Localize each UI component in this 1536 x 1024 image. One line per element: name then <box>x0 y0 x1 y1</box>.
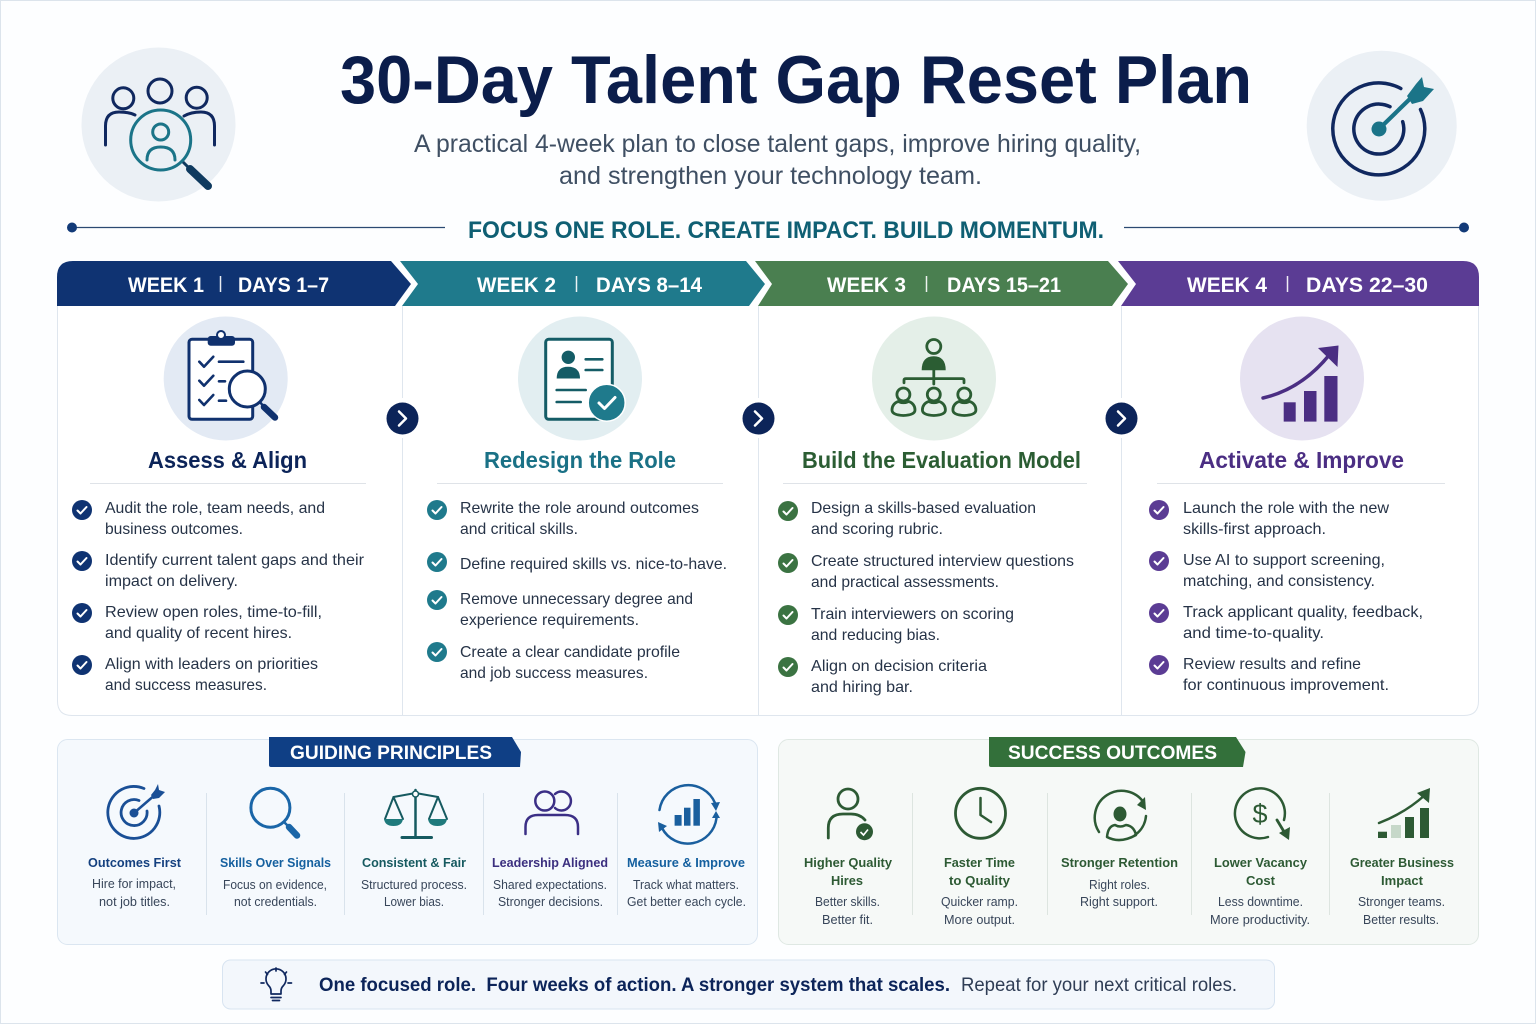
outcome: stronger retention: Right roles. <box>1089 878 1150 892</box>
icon: org hierarchy <box>872 316 996 440</box>
checklist: and scoring rubric. <box>811 521 943 538</box>
checklist: and reducing bias. <box>811 627 940 644</box>
outcome: greater business impact: Impact <box>1381 873 1424 888</box>
outcome: stronger retention <box>1061 791 1178 909</box>
tagline <box>67 217 1469 244</box>
outcome: faster time to quality <box>941 788 1018 927</box>
footer callout <box>222 960 1274 1009</box>
panel: weekly plan card <box>58 300 1478 716</box>
tagline: FOCUS ONE ROLE. CREATE IMPACT. BUILD MOMENTUM. <box>468 217 1104 244</box>
panel: week 1 assess and align <box>72 316 366 694</box>
checklist: and job success measures. <box>460 665 648 682</box>
principle: leadership aligned: Stronger decisions. <box>498 895 603 909</box>
week 1 ribbon: DAYS 1–7 <box>238 274 329 297</box>
panel: week 4 activate and improve <box>1149 316 1445 694</box>
panel: guiding principles <box>58 737 758 944</box>
outcome: faster time to quality: Quicker ramp. <box>941 895 1018 909</box>
checklist: Identify current talent gaps and their <box>105 552 365 569</box>
checklist: and critical skills. <box>460 521 578 538</box>
arrow: week 3 to week 4 <box>1106 402 1138 434</box>
checklist: experience requirements. <box>460 612 639 629</box>
outcome: stronger retention: Stronger Retention <box>1061 855 1178 870</box>
checklist: business outcomes. <box>105 521 243 538</box>
checklist: and practical assessments. <box>811 574 999 591</box>
heading: Redesign the Role <box>484 447 676 473</box>
week 2 ribbon: DAYS 8–14 <box>596 274 702 297</box>
principle: skills over signals: Focus on evidence, <box>223 878 327 892</box>
checklist: skills-first approach. <box>1183 521 1326 538</box>
checklist: Use AI to support screening, <box>1183 552 1385 569</box>
principle: outcomes first: not job titles. <box>99 895 170 909</box>
week 3 ribbon <box>755 261 1128 306</box>
checklist: Review results and refine <box>1183 656 1361 673</box>
outcome: greater business impact: Stronger teams. <box>1358 895 1445 909</box>
checklist: Align on decision criteria <box>811 658 987 675</box>
outcome: lower vacancy cost: $ <box>1252 799 1268 829</box>
week 2 ribbon <box>400 261 765 306</box>
outcome: higher quality hires: Better fit. <box>822 913 873 927</box>
heading: Build the Evaluation Model <box>802 447 1081 473</box>
checklist: Create structured interview questions <box>811 553 1074 570</box>
subtitle: A practical 4-week plan to close talent gaps, improve hiring quality, <box>414 130 1141 158</box>
banner: success outcomes: SUCCESS OUTCOMES <box>1008 743 1217 764</box>
principle: leadership aligned: Shared expectations. <box>493 878 607 892</box>
icon: team search <box>82 48 236 202</box>
outcome: faster time to quality: More output. <box>944 913 1015 927</box>
checklist: matching, and consistency. <box>1183 573 1375 590</box>
subtitle <box>414 130 1141 190</box>
checklist: impact on delivery. <box>105 573 238 590</box>
principle: outcomes first <box>88 784 182 909</box>
checklist: Launch the role with the new <box>1183 500 1389 517</box>
principle: outcomes first: Outcomes First <box>88 855 182 870</box>
week 4 ribbon <box>1118 261 1479 306</box>
outcome: faster time to quality: Faster Time <box>944 855 1015 870</box>
arrow: week 1 to week 2 <box>386 402 418 434</box>
outcome: greater business impact: Greater Business <box>1350 855 1454 870</box>
checklist: and time-to-quality. <box>1183 625 1324 642</box>
outcome: lower vacancy cost: More productivity. <box>1210 913 1310 927</box>
banner: success outcomes <box>989 737 1246 767</box>
panel: week 3 build the evaluation model <box>778 316 1087 696</box>
outcome: higher quality hires: Hires <box>831 873 863 888</box>
icon: target with arrow <box>1307 51 1457 201</box>
outcome: greater business impact: Better results. <box>1363 913 1439 927</box>
footer callout: One focused role. Four weeks of action. A stronger system that scales. <box>319 974 950 996</box>
principle: measure and improve: Get better each cycle. <box>627 895 746 909</box>
checklist: Audit the role, team needs, and <box>105 500 325 517</box>
icon: clipboard checklist <box>164 316 288 440</box>
outcome: greater business impact <box>1350 788 1454 927</box>
title: 30-Day Talent Gap Reset Plan <box>340 42 1252 118</box>
checklist: and quality of recent hires. <box>105 625 292 642</box>
checklist <box>427 500 727 682</box>
outcome: lower vacancy cost <box>1210 788 1310 927</box>
outcome: higher quality hires: Higher Quality <box>804 855 893 870</box>
principle: skills over signals: not credentials. <box>234 895 317 909</box>
principle: leadership aligned: Leadership Aligned <box>492 855 608 870</box>
week 4 ribbon: DAYS 22–30 <box>1306 274 1428 297</box>
week header ribbons <box>57 261 1479 306</box>
outcome: lower vacancy cost: Cost <box>1246 873 1276 888</box>
week 3 ribbon: DAYS 15–21 <box>947 274 1061 297</box>
checklist: Create a clear candidate profile <box>460 644 680 661</box>
checklist: Review open roles, time-to-fill, <box>105 604 322 621</box>
checklist: Rewrite the role around outcomes <box>460 500 699 517</box>
icon: lightbulb <box>261 968 292 1000</box>
principle: leadership aligned <box>492 792 608 909</box>
panel: success outcomes <box>778 737 1478 944</box>
week 1 ribbon <box>57 261 411 306</box>
principle: outcomes first: Hire for impact, <box>92 877 176 891</box>
principle: measure and improve: Measure & Improve <box>627 855 745 870</box>
outcome: faster time to quality: to Quality <box>949 873 1011 888</box>
heading: Assess & Align <box>148 447 307 473</box>
week 2 ribbon: WEEK 2 <box>477 274 556 297</box>
principle: consistent and fair: Consistent & Fair <box>362 855 466 870</box>
checklist: Define required skills vs. nice-to-have. <box>460 556 727 573</box>
panel: week 2 redesign the role <box>427 316 727 682</box>
outcome: stronger retention: Right support. <box>1080 895 1158 909</box>
banner: guiding principles <box>269 737 521 767</box>
week 3 ribbon: WEEK 3 <box>827 274 906 297</box>
checklist <box>778 500 1074 696</box>
outcome: higher quality hires: Better skills. <box>815 895 880 909</box>
principle: measure and improve: Track what matters. <box>633 878 739 892</box>
week 1 ribbon: WEEK 1 <box>128 274 204 297</box>
icon: rising bar chart <box>1240 316 1364 440</box>
checklist <box>1149 500 1423 694</box>
checklist: Train interviewers on scoring <box>811 606 1014 623</box>
principle: skills over signals: Skills Over Signals <box>220 855 331 870</box>
subtitle: and strengthen your technology team. <box>559 162 982 190</box>
checklist: Remove unnecessary degree and <box>460 591 693 608</box>
checklist: Track applicant quality, feedback, <box>1183 604 1423 621</box>
principle: measure and improve <box>627 785 746 909</box>
principle: skills over signals <box>220 788 331 909</box>
outcome: lower vacancy cost: Less downtime. <box>1218 895 1303 909</box>
checklist: Align with leaders on priorities <box>105 656 318 673</box>
week 4 ribbon: WEEK 4 <box>1187 274 1267 297</box>
icon: role document with check <box>518 316 642 440</box>
checklist: and hiring bar. <box>811 679 913 696</box>
principle: consistent and fair <box>361 790 467 909</box>
banner: guiding principles: GUIDING PRINCIPLES <box>290 743 492 764</box>
checklist: and success measures. <box>105 677 267 694</box>
checklist <box>72 500 365 694</box>
checklist: for continuous improvement. <box>1183 677 1389 694</box>
arrow: week 2 to week 3 <box>742 402 774 434</box>
footer callout: Repeat for your next critical roles. <box>961 974 1237 996</box>
outcome: higher quality hires <box>804 789 893 927</box>
principle: consistent and fair: Lower bias. <box>384 895 444 909</box>
outcome: lower vacancy cost: Lower Vacancy <box>1214 855 1308 870</box>
principle: consistent and fair: Structured process. <box>361 878 467 892</box>
checklist: Design a skills-based evaluation <box>811 500 1036 517</box>
heading: Activate & Improve <box>1199 447 1404 473</box>
